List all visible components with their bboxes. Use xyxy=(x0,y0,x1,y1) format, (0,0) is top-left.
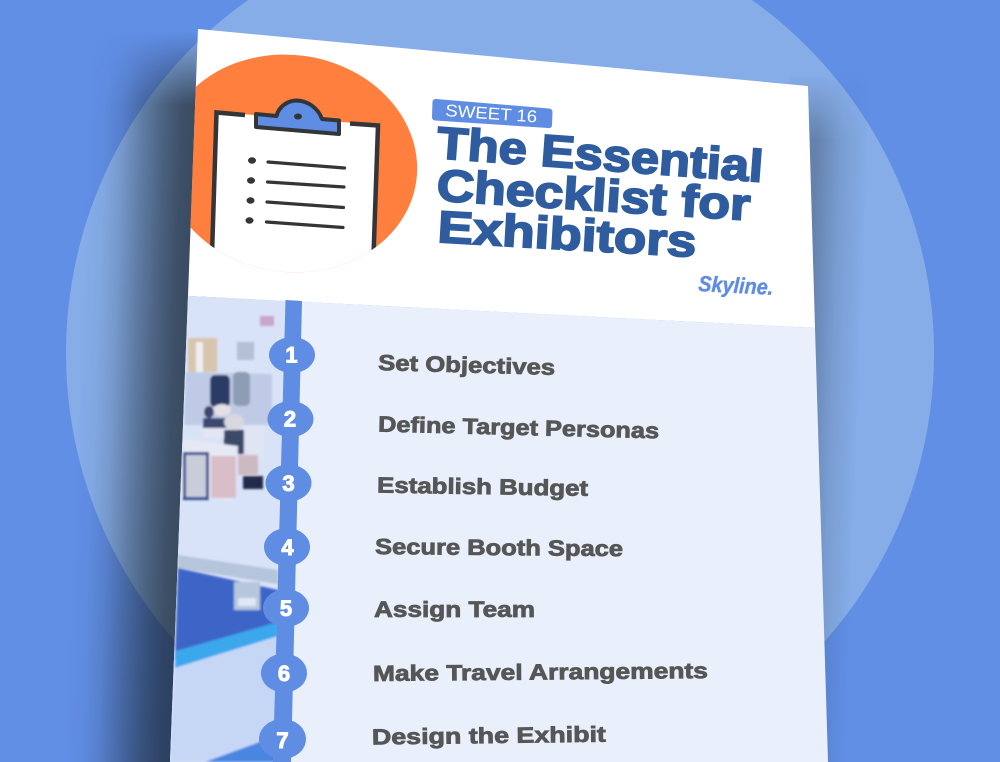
title: Exhibitors xyxy=(436,201,698,267)
title xyxy=(435,117,765,267)
clip hole xyxy=(294,114,302,120)
badge 6 xyxy=(261,654,307,692)
clipboard outline xyxy=(212,112,378,270)
page body panel xyxy=(170,296,828,762)
page header panel xyxy=(188,29,815,328)
background photo strip xyxy=(170,296,286,762)
item 6: Make Travel Arrangements xyxy=(373,658,708,686)
badge 7 xyxy=(259,719,306,759)
item 5: Assign Team xyxy=(374,597,535,622)
orange circle xyxy=(190,54,418,272)
badge 5 xyxy=(263,589,309,627)
title: The Essential xyxy=(435,117,765,192)
checklist page xyxy=(149,29,828,762)
badge numbers: 5 xyxy=(280,596,292,621)
clipboard sheet xyxy=(211,112,379,280)
icon: clipboard xyxy=(211,100,379,280)
item 3: Establish Budget xyxy=(377,473,589,501)
checklist items xyxy=(372,350,708,749)
badge numbers xyxy=(276,342,298,753)
badge numbers: 7 xyxy=(276,728,289,753)
badge numbers: 1 xyxy=(285,342,298,368)
clipboard clip xyxy=(256,100,339,134)
checklist lines xyxy=(266,162,344,228)
logo: skyline: Skyline. xyxy=(698,271,774,300)
badge numbers: 2 xyxy=(284,406,296,432)
badge 4 xyxy=(264,528,310,566)
badge 1 xyxy=(269,337,315,373)
checklist bullets xyxy=(246,157,256,224)
badge 3 xyxy=(266,464,312,502)
item 1: Set Objectives xyxy=(378,350,555,380)
tag: sweet 16 xyxy=(432,99,552,128)
number badges xyxy=(259,337,315,759)
badge numbers: 4 xyxy=(281,535,294,560)
tag: sweet 16: SWEET 16 xyxy=(445,101,538,126)
item 2: Define Target Personas xyxy=(378,412,659,443)
badge 2 xyxy=(268,401,314,437)
title: Checklist for xyxy=(435,160,752,230)
badge numbers: 6 xyxy=(278,661,290,686)
badge numbers: 3 xyxy=(282,471,295,496)
item 7: Design the Exhibit xyxy=(372,722,607,749)
timeline rail xyxy=(273,300,302,762)
item 4: Secure Booth Space xyxy=(375,534,623,561)
